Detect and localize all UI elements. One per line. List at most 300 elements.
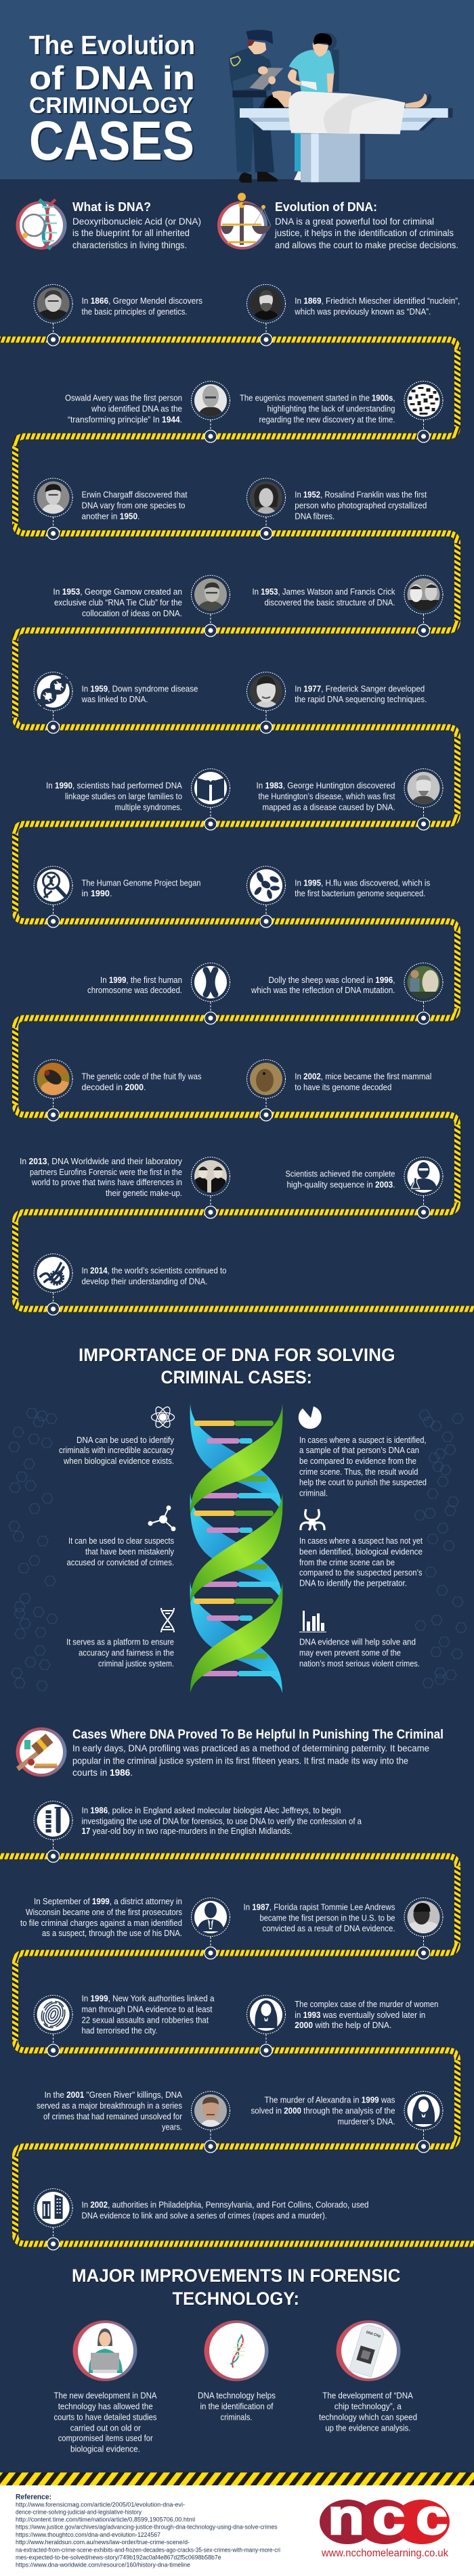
timeline item: 2000 fruit fly <box>34 1059 202 1121</box>
icon: woman silhouette <box>250 1998 282 2031</box>
text: that have been mistakenly <box>85 1546 174 1557</box>
blue strand <box>190 1404 282 1693</box>
text <box>295 1999 438 2030</box>
icon: woman at laptop in ring <box>73 2320 137 2381</box>
text: the first bacterium genome sequenced. <box>295 888 425 898</box>
heading: importance of DNA <box>79 1345 395 1387</box>
text <box>198 2391 276 2422</box>
info block: evolution of DNA <box>217 193 458 250</box>
green strand <box>190 1404 282 1693</box>
text: was linked to DNA. <box>81 694 148 704</box>
title: of DNA in <box>29 60 195 97</box>
heading: major improvements <box>72 2266 401 2309</box>
logo: ncc: c <box>372 2489 405 2545</box>
timeline item: 1950 Chargaff <box>34 478 188 540</box>
point: suspect not yet identified <box>299 1509 423 1588</box>
icon: magnifier over DNA <box>37 869 70 902</box>
heading: major improvements: MAJOR IMPROVEMENTS IN FORENSIC <box>72 2266 401 2286</box>
title: CASES <box>29 110 194 172</box>
text: a sample of that person’s DNA can <box>299 1445 419 1455</box>
text: In 1999, the first human <box>100 975 182 985</box>
timeline item: 1977 Sanger <box>246 672 427 733</box>
timeline item: 1953 Watson and Crick <box>252 575 443 637</box>
connector <box>246 284 286 346</box>
icon: DNA chip in ring: DNA Chip <box>366 2330 381 2339</box>
case: 1993 murder of women <box>246 1996 438 2056</box>
connector <box>191 1898 230 1959</box>
text: to file criminal charges against a man identified <box>20 1918 182 1928</box>
text: In 2002, mice became the first mammal <box>295 1072 431 1081</box>
text <box>240 392 395 425</box>
background hexagon pattern <box>9 1408 467 1690</box>
text: nation’s most serious violent crimes. <box>299 1659 420 1668</box>
improvement: DNA chip <box>319 2320 417 2433</box>
connector <box>34 1254 72 1315</box>
text: It can be used to clear suspects <box>68 1536 174 1546</box>
text: to have its genome decoded <box>295 1082 391 1092</box>
connector <box>191 2092 230 2153</box>
text: criminals. <box>221 2412 252 2422</box>
text: from the crime scene can be <box>299 1557 395 1567</box>
text: Oswald Avery was the first person <box>65 392 182 403</box>
text: the Huntington’s disease, which was first <box>259 791 395 801</box>
text <box>252 586 395 607</box>
portrait: George Huntington <box>408 772 440 804</box>
image: eugenics tree <box>408 384 440 417</box>
text: In 1953, George Gamow created an <box>53 586 182 597</box>
connector <box>246 866 286 927</box>
text: high-quality sequence in 2003. <box>287 1180 395 1189</box>
text: In 1987, Florida rapist Tommie Lee Andrews <box>244 1902 395 1912</box>
text: courts to have detailed studies <box>54 2412 157 2422</box>
portrait: Erwin Chargaff <box>37 482 70 514</box>
point: prevent violent crimes <box>299 1611 420 1668</box>
text: The Human Genome Project began <box>81 878 200 888</box>
connector <box>404 768 443 830</box>
icon: scales of justice in ring <box>217 193 271 250</box>
text: in the identification of <box>200 2401 274 2411</box>
text: partners Eurofins Forensic were the first in the <box>30 1167 182 1177</box>
connector <box>191 575 230 637</box>
text: mapped as a disease caused by DNA. <box>263 802 395 812</box>
body text: justice, it helps in the identification of criminals <box>274 227 454 238</box>
references: na-extracted-from-crime-scene-exhibits-and-frozen-decades-ago-cracks-35-sex-crimes-with-many-more-cri <box>16 2546 280 2553</box>
text: In 2002, authorities in Philadelphia, Pennsylvania, and Fort Collins, Colorado, used <box>81 2200 368 2209</box>
connector <box>191 1157 230 1218</box>
icon: bar chart <box>299 1611 326 1632</box>
case: 2001 Green River <box>37 2090 230 2153</box>
timeline item: 1866 Mendel <box>34 284 203 346</box>
text <box>65 392 182 425</box>
text: The new development in DNA <box>54 2391 157 2400</box>
text: person who photographed crystallized <box>295 501 427 510</box>
text <box>46 781 182 812</box>
text: years. <box>162 2121 182 2132</box>
text: In 1983, George Huntington discovered <box>256 781 395 790</box>
references: Reference: <box>16 2493 51 2502</box>
text: In 2013, DNA Worldwide and their laboratory <box>20 1156 182 1166</box>
text: be compared to evidence from the <box>299 1456 416 1466</box>
body text <box>274 216 458 250</box>
heading: Cases Where DNA Proved To Be Helpful In Punishing The Criminal <box>72 1728 444 1742</box>
icon: DNA strand in ring <box>204 2320 268 2381</box>
connector <box>34 284 72 346</box>
text: exclusive club “RNA Tie Club” for the <box>54 597 182 607</box>
references: http://www.forensicmag.com/article/2005/01/evolution-dna-evi- <box>16 2502 185 2508</box>
connector <box>34 478 72 540</box>
connector <box>34 866 72 927</box>
body text: and allows the court to make precise decisions. <box>275 239 458 250</box>
text: DNA evidence to link and solve a series of crimes (rapes and a murder). <box>81 2211 327 2220</box>
text: carried out on old or <box>70 2423 142 2433</box>
text: In 1952, Rosalind Franklin was the first <box>295 490 427 499</box>
connector <box>34 672 72 733</box>
text: world to prove that twins have differences in <box>31 1177 182 1187</box>
text <box>299 1536 423 1588</box>
text: 2000 with the help of DNA. <box>295 2020 391 2030</box>
text <box>256 781 395 812</box>
text: man through DNA evidence to at least <box>81 2004 213 2015</box>
connector <box>34 1059 72 1121</box>
autopsy table <box>240 108 452 182</box>
photo: fruit fly <box>37 1063 69 1095</box>
icon: man in suit <box>194 1901 227 1933</box>
info block: what is DNA <box>16 200 201 250</box>
text <box>81 683 198 704</box>
text: as a suspect, through the use of his DNA. <box>42 1928 182 1938</box>
body text: Deoxyribonucleic Acid (or DNA) <box>72 216 201 227</box>
text <box>81 1805 362 1836</box>
text: The genetic code of the fruit fly was <box>81 1072 202 1081</box>
patient under sheet <box>263 91 431 134</box>
text: DNA can be used to identify <box>77 1435 174 1445</box>
text: discovered the basic structure of DNA. <box>264 597 395 607</box>
text: murderer’s DNA. <box>337 2116 395 2127</box>
text: highlighting the lack of understanding <box>267 403 395 414</box>
timeline item: 1959 Down syndrome <box>34 672 198 733</box>
case: 1999 New York <box>34 1993 215 2056</box>
icon: DNA helix <box>37 674 70 708</box>
point: identify criminals <box>59 1405 175 1466</box>
text: “transforming principle” In 1944. <box>68 414 182 425</box>
text <box>81 878 200 898</box>
base pair rungs <box>194 1421 280 1676</box>
text: linkage studies on large families to <box>65 791 182 801</box>
text <box>59 1435 174 1466</box>
timeline item: 1996 Dolly <box>251 963 443 1024</box>
references: http://www.heraldsun.com.au/news/law-order/true-crime-scene/d- <box>16 2539 190 2546</box>
point: suspect identified <box>299 1406 427 1498</box>
portrait: Green River killer <box>194 2094 227 2127</box>
logo: ncc <box>320 2489 450 2559</box>
text: became the first person in the U.S. to be <box>260 1913 395 1923</box>
icon: DNA ladder <box>161 1608 174 1632</box>
connector <box>191 768 230 830</box>
text: technology has allowed the <box>58 2401 153 2411</box>
text: which was the reflection of DNA mutation. <box>251 985 395 995</box>
portrait: George Gamow <box>194 578 227 611</box>
icon: biohazard <box>301 1509 324 1530</box>
text: Wisconsin became one of the first prosecutors <box>26 1907 182 1917</box>
text: crime scene. Thus, the result would <box>299 1467 418 1477</box>
connector <box>34 1801 72 1862</box>
text <box>81 490 188 521</box>
text <box>251 975 395 995</box>
icon: bacteria <box>250 869 282 902</box>
text: of crimes that had remained unsolved for <box>43 2111 183 2121</box>
connector <box>191 382 230 442</box>
text: up the evidence analysis. <box>325 2423 410 2433</box>
text: The development of “DNA <box>322 2391 413 2400</box>
text: develop their understanding of DNA. <box>81 1276 207 1287</box>
icon: open book <box>194 772 227 804</box>
text: In September of 1999, a district attorney in <box>34 1896 182 1906</box>
references: https://www.dna-worldwide.com/resource/160/history-dna-timeline <box>16 2561 190 2568</box>
text <box>81 296 203 317</box>
text: decoded in 2000. <box>81 1082 146 1092</box>
timeline item: 1983 Huntington <box>256 768 443 830</box>
portrait: Tommie Lee Andrews <box>408 1901 440 1933</box>
text: Scientists achieved the complete <box>286 1169 395 1178</box>
portrait: Rosalind Franklin <box>250 482 282 514</box>
heading: importance of DNA: IMPORTANCE OF DNA FOR SOLVING <box>79 1345 395 1365</box>
text: The eugenics movement started in the 1900s, <box>240 392 395 403</box>
timeline item: 1995 H.flu <box>246 866 431 927</box>
text: the basic principles of genetics. <box>81 306 187 317</box>
doctor <box>288 33 339 181</box>
logo: ncc: c <box>416 2489 448 2545</box>
point: accuracy and fairness <box>66 1608 174 1668</box>
text: In 1959, Down syndrome disease <box>81 683 198 694</box>
text: chromosome was decoded. <box>87 985 182 995</box>
icon: DNA in ring <box>16 200 66 250</box>
hazard tape timeline: cases <box>0 1856 474 2244</box>
text: accuracy and fairness in the <box>79 1648 174 1657</box>
illustration: DNA double helix <box>190 1404 282 1693</box>
text: collocation of ideas on DNA. <box>82 608 182 618</box>
intro text <box>72 1743 429 1778</box>
timeline item: 1990 Human Genome Project <box>34 866 200 927</box>
connector <box>404 1898 443 1959</box>
icon: city buildings <box>37 2192 70 2224</box>
text: DNA to identify the perpetrator. <box>299 1578 407 1588</box>
text: investigating the use of DNA for forensics, to use DNA to verify the confession of a <box>81 1816 362 1826</box>
timeline item: 1953 Gamow <box>53 575 230 637</box>
text <box>295 1072 431 1092</box>
text: DNA evidence will help solve and <box>299 1637 416 1647</box>
connector <box>34 1996 72 2056</box>
references: https://www.thoughtco.com/dna-and-evolution-1224567 <box>16 2531 160 2538</box>
connector <box>246 1996 286 2056</box>
references <box>16 2493 280 2568</box>
photo: Dolly the sheep <box>408 966 440 998</box>
heading: importance of DNA: CRIMINAL CASES: <box>161 1367 312 1387</box>
icon: DNA and gear <box>37 1257 70 1289</box>
text: when biological evidence exists. <box>63 1456 174 1466</box>
text: their genetic make-up. <box>106 1188 182 1198</box>
text <box>66 1637 174 1668</box>
icon: fingerprint <box>37 1998 70 2031</box>
title <box>29 31 195 172</box>
text: It serves as a platform to ensure <box>66 1637 174 1647</box>
text: in 1990. <box>81 888 112 898</box>
text: the rapid DNA sequencing techniques. <box>295 694 427 704</box>
text: In 1995, H.flu was discovered, which is <box>295 878 431 888</box>
connector <box>404 2092 443 2153</box>
icon: molecule <box>149 1506 175 1530</box>
text: DNA technology helps <box>198 2391 276 2400</box>
text: biological evidence. <box>70 2443 140 2454</box>
police officer <box>229 30 283 183</box>
text: chip technology”, a <box>335 2401 402 2411</box>
body text: DNA is a great powerful tool for criminal <box>275 216 434 227</box>
text: compromised items used for <box>58 2433 153 2443</box>
text <box>299 1435 427 1498</box>
text: had terrorised the city. <box>81 2025 157 2036</box>
photo: mouse <box>250 1063 282 1095</box>
text <box>299 1637 420 1668</box>
text: DNA fibres. <box>295 511 335 521</box>
header panel <box>0 0 474 186</box>
case: Alexandra <box>251 2092 443 2153</box>
icon: gavel in ring <box>16 1728 66 1776</box>
timeline item: 2013 twins <box>20 1156 230 1218</box>
text <box>81 1993 215 2036</box>
timeline item: 1900s eugenics <box>240 382 443 442</box>
case: 1986 Alec Jeffreys <box>34 1801 362 1862</box>
title: CRIMINOLOGY <box>29 93 193 118</box>
timeline item: 1869 Miescher <box>246 284 460 346</box>
portrait: Frederick Sanger <box>250 675 282 708</box>
timeline item: 1999 chromosome <box>87 963 230 1024</box>
text <box>87 975 182 995</box>
references: http://content.time.com/time/nation/article/0,8599,1905706,00.html <box>16 2516 195 2523</box>
text: 17 year-old boy in two rape-murders in the English Midlands. <box>81 1826 293 1836</box>
timeline item: 2014 <box>34 1254 226 1315</box>
text <box>244 1902 395 1933</box>
text: in 1993 was eventually solved later in <box>295 2010 425 2020</box>
intro text: popular in the criminal justice system in its first fifteen years. It first made its way into the <box>72 1755 408 1766</box>
text <box>251 2094 395 2127</box>
text: DNA vary from one species to <box>81 501 186 510</box>
text: Erwin Chargaff discovered that <box>81 490 188 499</box>
text <box>286 1169 395 1189</box>
intro text: In early days, DNA profiling was practiced as a method of determining paternity. It became <box>72 1743 429 1753</box>
icon: DNA chip in ring <box>336 2320 401 2381</box>
text: In cases where a suspect has not yet <box>299 1536 423 1546</box>
icon: atom <box>152 1405 175 1429</box>
text: solved in 2000 through the analysis of the <box>251 2105 395 2116</box>
references: mes-expected-to-be-solved/news-story/749b192ac0af4e867d2f5c0698b58b7e <box>16 2554 221 2561</box>
text: criminals with incredible accuracy <box>59 1445 174 1455</box>
text: In 1999, New York authorities linked a <box>81 1993 215 2004</box>
connector <box>246 1059 286 1121</box>
text: The murder of Alexandra in 1999 was <box>264 2094 395 2105</box>
hazard tape timeline: evolution <box>0 340 474 1309</box>
portrait: Watson and Crick <box>408 578 440 611</box>
connector <box>404 382 443 442</box>
connector <box>246 478 286 540</box>
title: The Evolution <box>29 31 195 60</box>
connector <box>191 963 230 1024</box>
text: been identified, biological evidence <box>299 1546 423 1557</box>
text: technology which can speed <box>319 2412 417 2422</box>
connector <box>404 575 443 637</box>
text: In 1869, Friedrich Miescher identified “nuclein”, <box>295 296 460 306</box>
connector <box>404 1157 443 1218</box>
icon: pie shape <box>299 1406 322 1429</box>
section: cases intro <box>16 1728 444 1778</box>
point: clear suspects <box>66 1506 175 1567</box>
references: https://www.justice.gov/archives/ag/advancing-justice-through-dna-technology-using-dna-solve-crimes <box>16 2523 278 2530</box>
text: In 1990, scientists had performed DNA <box>46 781 182 790</box>
text: In 1977, Frederick Sanger developed <box>295 683 425 694</box>
body text: characteristics in living things. <box>72 239 187 250</box>
hazard stripe band <box>0 2472 474 2485</box>
text: In the 2001 "Green River" killings, DNA <box>45 2090 182 2100</box>
icon: chromosome <box>194 966 227 998</box>
text: 22 sexual assaults and robberies that <box>81 2015 209 2025</box>
text: multiple syndromes. <box>115 802 182 812</box>
text: In 1986, police in England asked molecular biologist Alec Jeffreys, to begin <box>81 1805 341 1816</box>
references: dence-crime-solving-judicial-and-legislative-history <box>16 2508 142 2515</box>
text: regarding the new discovery at the time. <box>259 414 395 425</box>
icon: scientist with flask <box>408 1160 440 1193</box>
icon: woman silhouette <box>408 2094 440 2127</box>
photo: twins <box>194 1160 227 1193</box>
text <box>295 490 427 521</box>
improvement: identification <box>198 2320 276 2422</box>
text: In cases where a suspect is identified, <box>299 1435 427 1445</box>
text <box>54 2391 157 2454</box>
text: another in 1950. <box>81 511 139 521</box>
body text: is the blueprint for all inherited <box>72 227 190 238</box>
text <box>20 1896 182 1938</box>
text <box>81 1072 202 1092</box>
text: help the court to punish the suspected <box>299 1477 427 1487</box>
portrait: Oswald Avery <box>194 384 227 417</box>
text <box>81 1265 226 1287</box>
text <box>20 1156 182 1198</box>
text <box>294 296 460 317</box>
text: In 1866, Gregor Mendel discovers <box>81 296 203 306</box>
logo: ncc: n <box>328 2489 364 2545</box>
timeline item: 1952 Franklin <box>246 478 427 540</box>
case: 2002 Philadelphia <box>34 2189 368 2250</box>
text: In 1953, James Watson and Francis Crick <box>252 586 395 597</box>
timeline item: 2002 mice <box>246 1059 431 1121</box>
text <box>66 1536 174 1567</box>
illustration: police officer and doctor examining a body <box>223 30 460 186</box>
text <box>295 878 431 898</box>
text <box>319 2391 417 2433</box>
text: who identified DNA as the <box>91 403 182 414</box>
text: may even prevent some of the <box>299 1648 401 1657</box>
case: 1987 Tommie Lee Andrews <box>244 1898 443 1959</box>
logo: ncc: www.ncchomelearning.co.uk <box>321 2548 448 2559</box>
text <box>81 2200 368 2220</box>
heading: major improvements: TECHNOLOGY: <box>172 2288 299 2309</box>
portrait: Gregor Mendel <box>37 288 70 320</box>
connector <box>404 963 443 1024</box>
portrait: Friedrich Miescher <box>250 288 282 320</box>
heading: Evolution of DNA: <box>275 200 377 214</box>
intro text: courts in 1986. <box>72 1767 133 1778</box>
heading: What is DNA? <box>72 200 151 214</box>
text: served as a major breakthrough in a series <box>37 2100 182 2111</box>
text: which was previously known as “DNA”. <box>294 306 431 317</box>
text: convicted as a result of DNA evidence. <box>263 1923 395 1933</box>
